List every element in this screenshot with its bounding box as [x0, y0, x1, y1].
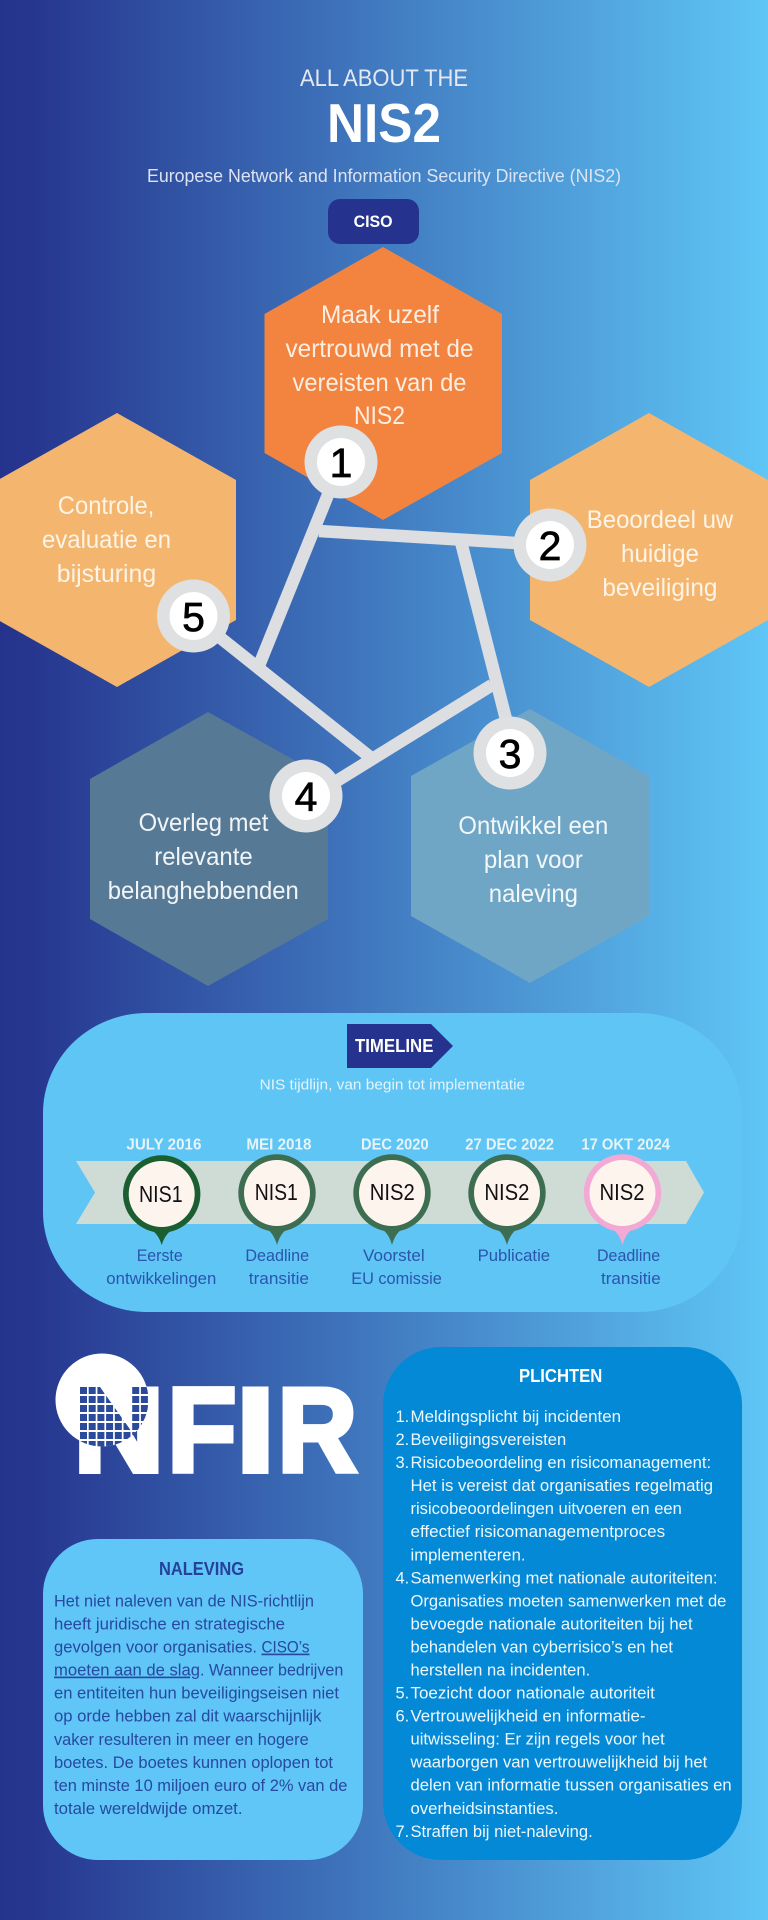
plichten numbered list: herstellen na incidenten. — [410, 1662, 590, 1680]
hexagon 4: overleg: Overleg met — [139, 809, 268, 837]
step badge 3 — [474, 716, 546, 790]
hexagon 4: overleg — [90, 712, 328, 986]
pin: NIS2 2020 — [353, 1154, 431, 1245]
naleving body text: CISO’s — [262, 1639, 310, 1657]
hexagon 1: vertrouwd maken: Maak uzelf — [321, 301, 439, 329]
plichten numbered list: uitwisseling: Er zijn regels voor het — [410, 1731, 665, 1749]
panel: naleving — [43, 1539, 363, 1860]
pin captions: transitie — [249, 1269, 309, 1288]
hexagon 3: ontwikkelen: plan voor — [484, 846, 583, 874]
step badge 1: 1 — [330, 440, 352, 486]
naleving body text: heeft juridische en strategische — [54, 1616, 285, 1634]
panel: timeline — [43, 1013, 742, 1312]
hexagon 5: controle — [0, 413, 236, 687]
step badge 5: 5 — [182, 594, 205, 640]
logo: NFIR: R — [278, 1364, 357, 1498]
logo: NFIR: N — [73, 1364, 164, 1498]
pin captions: Deadline — [597, 1246, 660, 1265]
connector lines between steps — [193, 470, 549, 800]
hexagon 4: overleg: belanghebbenden — [108, 877, 299, 905]
plichten numbered list: delen van informatie tussen organisaties en — [410, 1777, 732, 1795]
pin captions: Eerste — [137, 1246, 183, 1265]
hexagon 2: beoordelen: beveiliging — [602, 574, 717, 602]
hexagon 5: controle: evaluatie en — [42, 526, 171, 554]
step badge 4: 4 — [295, 774, 317, 820]
CISO badge: CISO — [354, 212, 393, 231]
panel: plichten — [383, 1347, 742, 1860]
logo: NFIR: I — [236, 1364, 275, 1498]
step badge 4 — [270, 760, 342, 832]
step badge 2 — [514, 508, 586, 582]
naleving body text: moeten aan de slag — [54, 1662, 200, 1680]
plichten numbered list: 3. — [396, 1454, 409, 1472]
pin captions: transitie — [601, 1269, 661, 1288]
timeline arrow heading: TIMELINE — [355, 1036, 433, 1056]
title block — [147, 65, 621, 186]
CISO badge — [328, 199, 419, 244]
naleving body text: totale wereldwijde omzet. — [54, 1800, 242, 1818]
naleving body text — [54, 1592, 347, 1818]
plichten numbered list: Toezicht door nationale autoriteit — [410, 1684, 655, 1702]
plichten numbered list — [396, 1408, 732, 1841]
step badge 3: 3 — [499, 731, 521, 777]
timeline ribbon — [76, 1161, 704, 1224]
pin: NIS1 2016 — [123, 1155, 200, 1245]
main title: NIS2: NIS2 — [327, 92, 441, 154]
plichten heading: PLICHTEN — [519, 1366, 602, 1386]
pin: NIS2 2024: NIS2 — [600, 1179, 644, 1205]
hexagon 2: beoordelen: Beoordeel uw — [587, 506, 734, 534]
hexagon 3: ontwikkelen — [411, 709, 649, 983]
hexagon 3: ontwikkelen: Ontwikkel een — [458, 812, 608, 840]
plichten numbered list: waarborgen van vertrouwelijkheid bij het — [409, 1754, 708, 1772]
plichten numbered list: 2. — [396, 1431, 409, 1449]
pin captions — [106, 1246, 661, 1288]
pin: NIS2 2022 — [468, 1154, 546, 1245]
naleving body text: en entiteiten hun beveiligingseisen niet — [54, 1685, 339, 1703]
plichten numbered list: behandelen van cyberrisico’s en het — [410, 1638, 673, 1656]
naleving body text: Het niet naleven van de NIS-richtlijn — [54, 1592, 314, 1610]
pin: NIS1 2018 — [238, 1154, 316, 1245]
plichten numbered list: bevoegde nationale autoriteiten bij het — [410, 1615, 693, 1633]
hexagon 3: ontwikkelen: naleving — [489, 880, 578, 908]
hexagon 1: vertrouwd maken — [264, 247, 502, 520]
naleving body text: ten minste 10 miljoen euro of 2% van de — [54, 1777, 347, 1795]
timeline dates: 27 DEC 2022 — [465, 1136, 554, 1154]
pin: NIS2 2024 — [584, 1154, 661, 1245]
hexagon 1: vertrouwd maken: vertrouwd met de — [286, 335, 474, 363]
hexagon 5: controle: bijsturing — [57, 560, 156, 588]
plichten numbered list: overheidsinstanties. — [410, 1800, 558, 1818]
naleving heading: NALEVING — [159, 1559, 244, 1579]
timeline dates: 17 OKT 2024 — [581, 1136, 670, 1154]
plichten numbered list: 7. — [396, 1823, 409, 1841]
logo: NFIR: F — [167, 1364, 236, 1498]
plichten numbered list: Organisaties moeten samenwerken met de — [410, 1592, 726, 1610]
step badge 1 — [304, 426, 378, 498]
timeline dates: DEC 2020 — [361, 1136, 429, 1154]
plichten numbered list: risicobeoordelingen uitvoeren en een — [410, 1500, 682, 1518]
kicker: all about the: ALL ABOUT THE — [300, 65, 468, 92]
pin: NIS1 2018: NIS1 — [255, 1179, 298, 1205]
plichten numbered list: 1. — [396, 1408, 409, 1426]
plichten numbered list: effectief risicomanagementproces — [410, 1523, 665, 1541]
hexagon 2: beoordelen: huidige — [621, 540, 699, 568]
plichten numbered list: implementeren. — [410, 1546, 526, 1564]
plichten numbered list: 5. — [396, 1684, 409, 1702]
naleving body text: gevolgen voor organisaties. — [54, 1639, 257, 1657]
pin: NIS2 2022: NIS2 — [484, 1179, 529, 1205]
naleving body text: op orde hebben zal dit waarschijnlijk — [54, 1708, 322, 1726]
subtitle: Europese Network and Information Security Directive (NIS2) — [147, 165, 621, 186]
pin captions: EU comissie — [351, 1269, 442, 1288]
plichten numbered list: Meldingsplicht bij incidenten — [410, 1408, 621, 1426]
hexagon 4: overleg: relevante — [154, 843, 253, 871]
hexagon 5: controle: Controle, — [58, 492, 154, 520]
plichten numbered list: Vertrouwelijkheid en informatie- — [410, 1708, 646, 1726]
plichten numbered list: Straffen bij niet-naleving. — [410, 1823, 593, 1841]
plichten numbered list: 4. — [396, 1569, 409, 1587]
step badge 5 — [157, 580, 230, 652]
hexagon 1: vertrouwd maken: NIS2 — [354, 402, 405, 430]
timeline dates — [126, 1136, 670, 1154]
plichten numbered list: 6. — [396, 1708, 409, 1726]
pin captions: ontwikkelingen — [106, 1269, 216, 1288]
hexagon 1: vertrouwd maken: vereisten van de — [292, 369, 466, 397]
naleving body text: boetes. De boetes kunnen oplopen tot — [54, 1754, 333, 1772]
pin captions: Voorstel — [363, 1246, 425, 1265]
timeline dates: JULY 2016 — [126, 1136, 201, 1154]
naleving body text: . Wanneer bedrijven — [200, 1662, 343, 1680]
logo: NFIR — [56, 1354, 360, 1474]
step badge 2: 2 — [539, 523, 561, 569]
timeline subtitle: NIS tijdlijn, van begin tot implementatie — [260, 1076, 525, 1094]
plichten numbered list: Het is vereist dat organisaties regelmatig — [410, 1477, 713, 1495]
naleving body text: vaker resulteren in meer en hogere — [54, 1731, 309, 1749]
hexagon 2: beoordelen — [530, 413, 768, 687]
timeline dates: MEI 2018 — [246, 1136, 311, 1154]
pin captions: Deadline — [245, 1246, 309, 1265]
plichten numbered list: Beveiligingsvereisten — [410, 1431, 566, 1449]
pin: NIS2 2020: NIS2 — [370, 1179, 415, 1205]
plichten numbered list: Samenwerking met nationale autoriteiten: — [410, 1569, 718, 1587]
pin captions: Publicatie — [478, 1246, 550, 1265]
timeline arrow heading — [347, 1024, 453, 1068]
pin: NIS1 2016: NIS1 — [139, 1181, 183, 1207]
plichten numbered list: Risicobeoordeling en risicomanagement: — [410, 1454, 711, 1472]
